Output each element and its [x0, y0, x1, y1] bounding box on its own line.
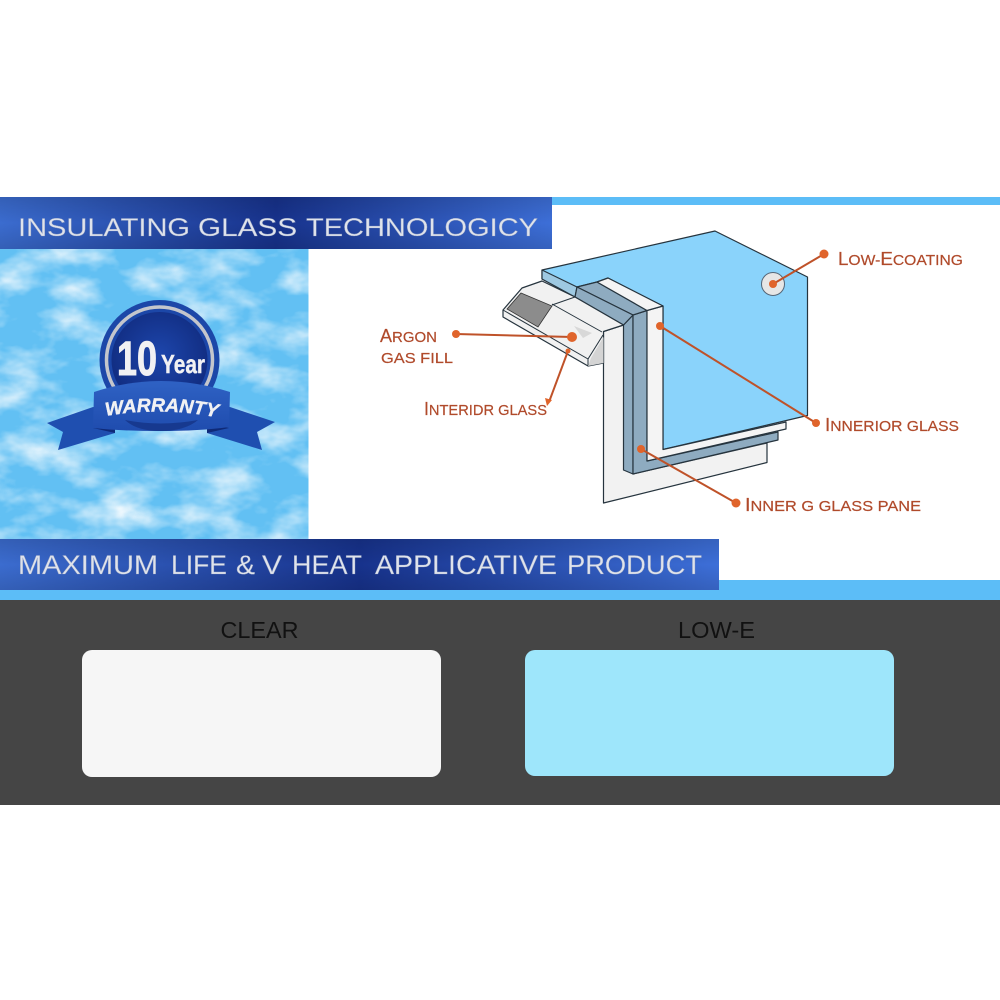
banner subtitle: V — [262, 550, 282, 580]
clear swatch — [82, 650, 441, 777]
callout: low-e coating — [769, 249, 963, 288]
lower light blue strip — [0, 580, 1000, 600]
inner white strip — [597, 278, 786, 461]
banner subtitle: MAXIMUM — [18, 550, 158, 580]
pane lip — [542, 270, 577, 297]
banner subtitle: PRODUCT — [567, 550, 702, 580]
callout: innerior glass: INNERIOR GLASS — [825, 415, 959, 435]
bottom banner — [0, 539, 719, 590]
callout: inner glass pane — [637, 445, 921, 515]
low-e swatch — [525, 650, 894, 776]
banner title: GLASS — [198, 214, 297, 242]
ribbon — [47, 381, 275, 450]
banner subtitle: & — [236, 550, 255, 580]
left protruding section — [503, 281, 624, 366]
callout: interior glass: INTERIDR GLASS — [424, 399, 547, 419]
top banner — [0, 197, 552, 249]
callout: interior glass — [424, 348, 570, 419]
ribbon text: warranty: WARRANTY — [105, 398, 222, 416]
badge text: 10 Year — [117, 333, 205, 386]
back blue pane — [542, 231, 808, 450]
callout: argon gas fill: GAS FILL — [381, 350, 453, 367]
callout: innerior glass — [656, 322, 959, 435]
banner subtitle: LIFE — [171, 550, 227, 580]
badge seal — [100, 300, 220, 420]
top light blue strip — [552, 197, 1000, 205]
panel: comparison — [0, 600, 1000, 805]
banner subtitle: HEAT — [292, 550, 362, 580]
callout: low-e coating: LOW-ECOATING — [838, 249, 963, 269]
callout: argon gas fill — [380, 326, 577, 367]
callout: argon gas fill: ARGON — [380, 326, 437, 346]
callout: inner glass pane: INNER G GLASS PANE — [745, 495, 921, 515]
badge text: 10 Year: Year — [161, 349, 205, 379]
banner subtitle: APPLICATIVE — [375, 550, 557, 580]
banner title — [18, 214, 538, 242]
low-e label: LOW-E — [678, 617, 755, 643]
badge text: 10 Year: 10 — [117, 333, 157, 386]
clear label: CLEAR — [220, 617, 298, 643]
warranty badge — [47, 300, 275, 450]
banner subtitle — [18, 550, 702, 580]
panel: water background — [0, 249, 308, 539]
banner title: INSULATING — [18, 214, 190, 242]
low-e coating spot — [762, 272, 784, 296]
blue-grey spacer — [575, 282, 778, 474]
glass unit diagram — [503, 231, 808, 503]
outer white frame — [604, 325, 767, 503]
banner title: TECHNOLOGICY — [306, 214, 538, 242]
